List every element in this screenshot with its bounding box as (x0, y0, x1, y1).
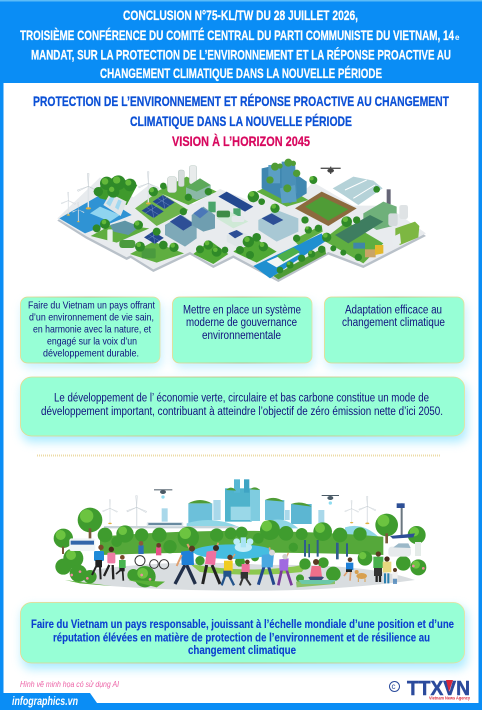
outdoor gym (304, 540, 348, 559)
logo: TTXVN: TTXVN (407, 678, 470, 700)
header title: e (455, 33, 460, 42)
card: sustainable country: Faire du Vietnam un pays offrant (28, 300, 155, 312)
family walking (373, 551, 398, 584)
top light strip (0, 0, 482, 2)
footer tab: infographics.vn: infographics.vn (12, 696, 78, 708)
card: sustainable country: en harmonie avec la nature, et (33, 324, 151, 336)
illustration: people exercising in eco city park (54, 479, 426, 591)
truck (395, 222, 419, 245)
runner pink (104, 547, 115, 579)
footer tab: infographics.vn (0, 693, 97, 710)
card: climate adaptation (324, 297, 464, 363)
grass strips (65, 580, 165, 587)
card: sustainable country: développement durable. (43, 348, 139, 360)
hydro dam (103, 193, 127, 216)
main heading (33, 93, 449, 129)
illustration: isometric green city (57, 159, 426, 282)
card: responsible country: changement climatique (188, 645, 296, 657)
exercising grandmother (278, 553, 292, 585)
car and charger (388, 547, 411, 557)
wind turbines (77, 173, 99, 209)
runner child (116, 555, 126, 581)
canal and ship (253, 233, 325, 278)
trees dark (93, 175, 380, 273)
trees highlights (102, 176, 348, 265)
header title: CONCLUSION N°75-KL/TW DU 28 JUILLET 2026, (123, 7, 358, 23)
green lawns (93, 176, 137, 205)
wind turbines (102, 500, 117, 524)
cyclists (135, 556, 169, 569)
greenhouse (333, 177, 383, 205)
background trees (54, 508, 426, 587)
plaza ground (80, 563, 415, 591)
card: sustainable country: d’un environnement de vie sain, (29, 312, 154, 324)
flowers (70, 565, 425, 581)
water left (59, 195, 132, 233)
towers (187, 479, 380, 538)
charging station (218, 192, 253, 212)
drone (321, 167, 341, 174)
conveyor hall (335, 215, 383, 243)
card: climate adaptation: changement climatique (342, 317, 445, 329)
tree highlights (56, 509, 420, 579)
header title (20, 7, 460, 81)
hedge band (100, 531, 383, 555)
logo: TTXVN: c (392, 682, 396, 691)
exercising grandfather (258, 547, 275, 585)
card: climate adaptation: Adaptation efficace au (345, 304, 442, 316)
card: environmental governance: Mettre en place un système (183, 304, 301, 316)
skyline distant (162, 500, 324, 523)
fountain pool (193, 544, 273, 559)
exercising child yellow (222, 554, 235, 585)
exercising child pink (240, 560, 251, 585)
smart pole (401, 503, 403, 537)
subheading: vision 2045: VISION À L’HORIZON 2045 (172, 133, 310, 149)
card: sustainable country: engagé sur la voix d’un (47, 336, 137, 348)
card glows (22, 302, 467, 669)
card: green economy (20, 377, 464, 436)
card: environmental governance (172, 297, 312, 363)
forklift and boxes (365, 249, 376, 257)
bus (69, 538, 95, 551)
main heading: CLIMATIQUE DANS LA NOUVELLE PÉRIODE (130, 113, 352, 129)
card: responsible country (20, 602, 464, 663)
exercising man blue (175, 544, 195, 584)
footer bar (0, 703, 482, 710)
card: sustainable country (20, 297, 160, 363)
solar arrays (153, 195, 175, 209)
card: environmental governance: environnementale (202, 330, 281, 342)
green towers (262, 164, 307, 203)
eco buildings (165, 215, 197, 247)
exercising woman pink (203, 543, 220, 584)
monorail (104, 526, 237, 528)
logo: TTXVN: Vietnam News Agency (429, 696, 470, 700)
yoga woman (298, 559, 337, 584)
drones (154, 489, 339, 500)
card: environmental governance: moderne de gouvernance (186, 317, 297, 329)
running child with dog (344, 557, 367, 582)
AI illustration credit: Hình vẽ minh họa có sử dụng AI (20, 679, 120, 689)
platform (57, 180, 426, 282)
storage tanks (167, 177, 177, 193)
dotted gold divider (37, 454, 440, 456)
factory (387, 189, 391, 204)
runner blue (92, 545, 104, 579)
